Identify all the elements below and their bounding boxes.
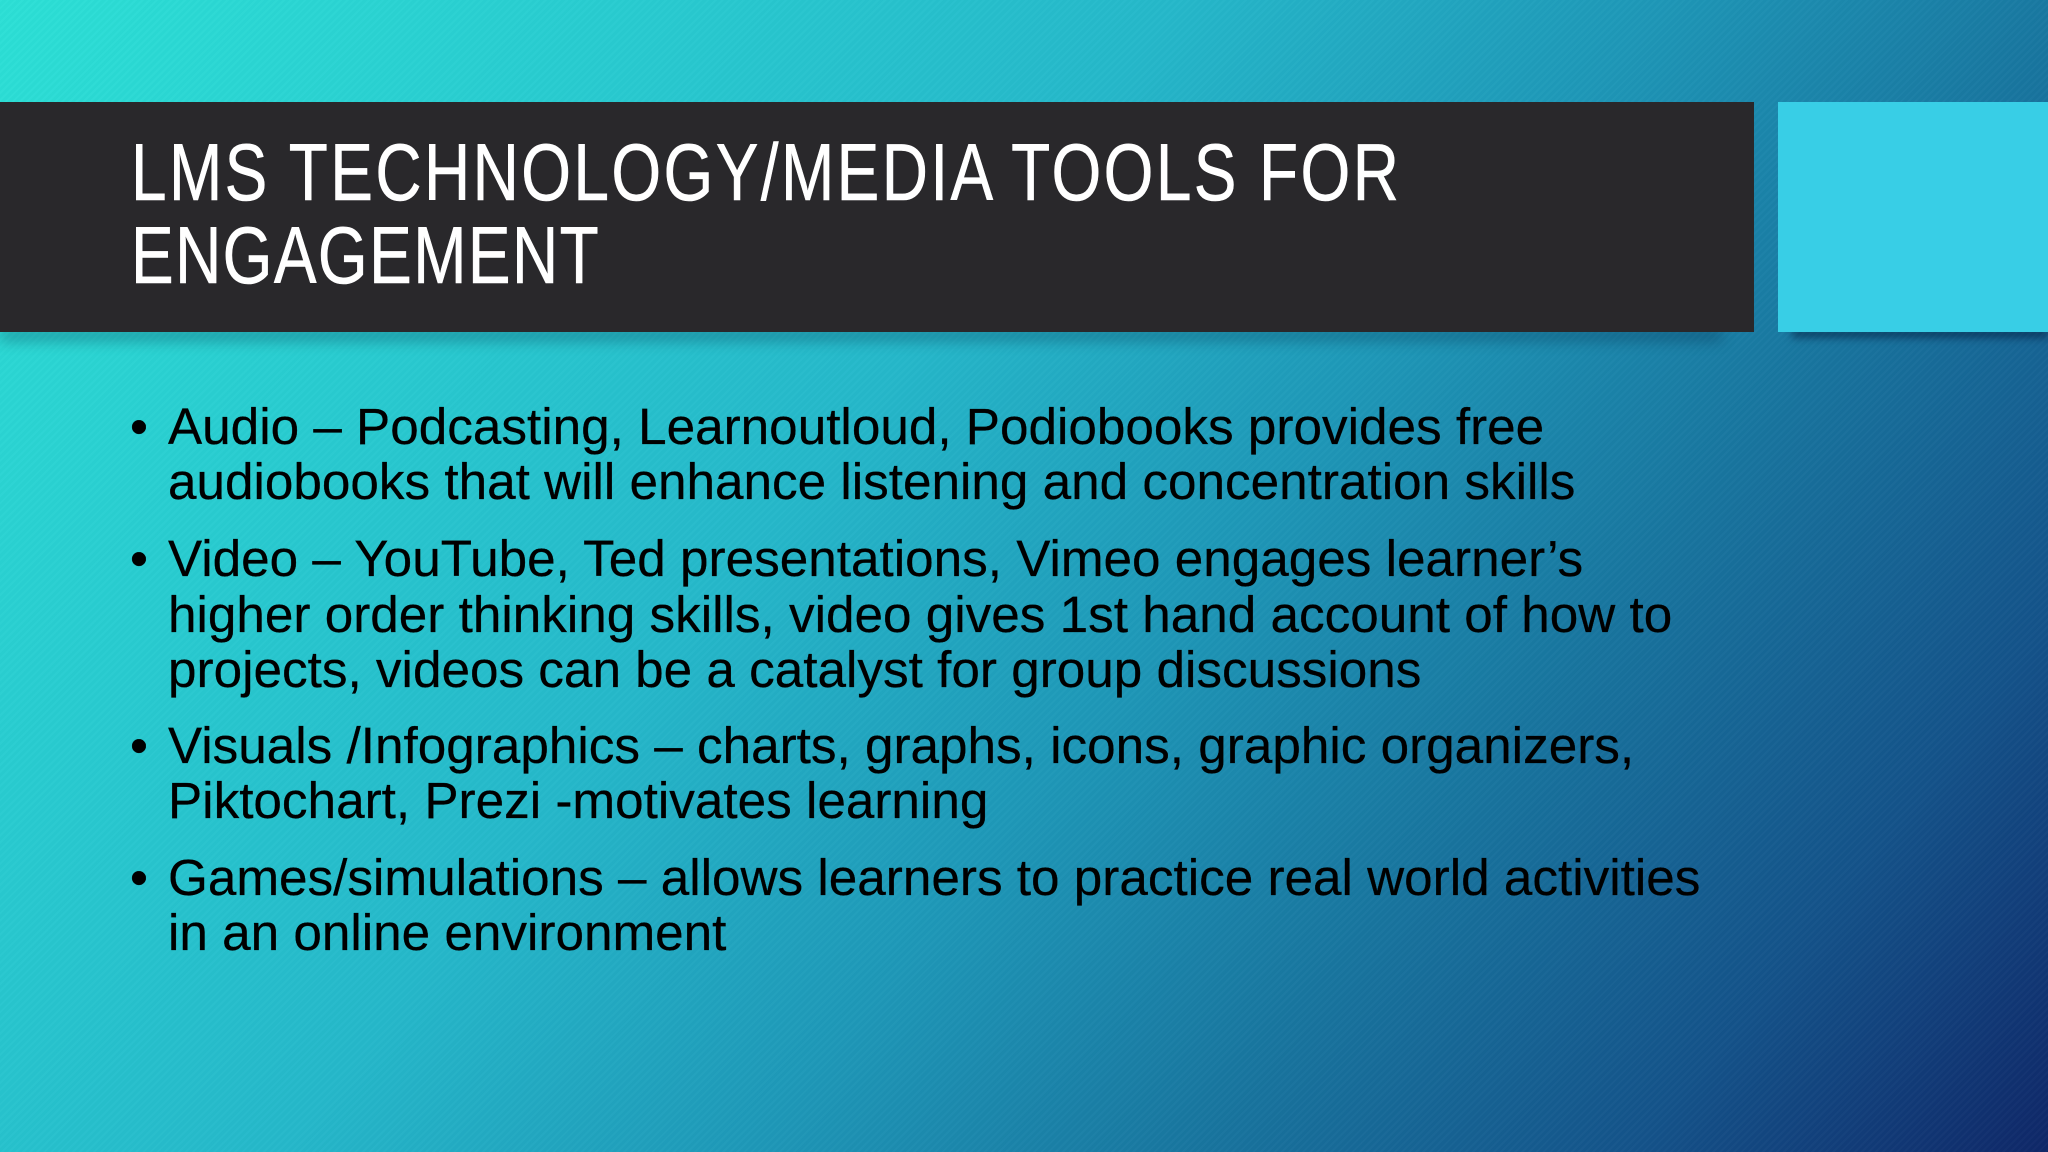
bullet: audio: Audio – Podcasting, Learnoutloud, Podiobooks provides free	[168, 398, 1544, 455]
accent square	[1778, 102, 2048, 332]
bullet: audio	[130, 398, 1575, 510]
title: ENGAGEMENT	[131, 211, 599, 301]
bullet: games: Games/simulations – allows learners to practice real world activities	[168, 849, 1700, 906]
bullet: games	[130, 849, 1700, 961]
bullet: visuals	[130, 717, 1634, 829]
bullet: visuals: Visuals /Infographics – charts, graphs, icons, graphic organizers,	[168, 717, 1634, 774]
title bar	[0, 102, 1754, 332]
bullet: video	[130, 530, 1672, 698]
bullet: video: projects, videos can be a catalyst for group discussions	[168, 641, 1421, 698]
bullet: visuals: Piktochart, Prezi -motivates learning	[168, 772, 988, 829]
bullet: video: Video – YouTube, Ted presentations, Vimeo engages learner’s	[168, 530, 1583, 587]
bullet list	[130, 398, 1700, 961]
bullet: visuals: •	[130, 717, 148, 774]
title	[131, 128, 1399, 301]
bullet: audio: audiobooks that will enhance listening and concentration skills	[168, 453, 1575, 510]
title: LMS TECHNOLOGY/MEDIA TOOLS FOR	[131, 128, 1399, 218]
bullet: games: in an online environment	[168, 904, 726, 961]
bullet: games: •	[130, 849, 148, 906]
bullet: video: higher order thinking skills, video gives 1st hand account of how to	[168, 586, 1672, 643]
bullet: video: •	[130, 530, 148, 587]
bullet: audio: •	[130, 398, 148, 455]
